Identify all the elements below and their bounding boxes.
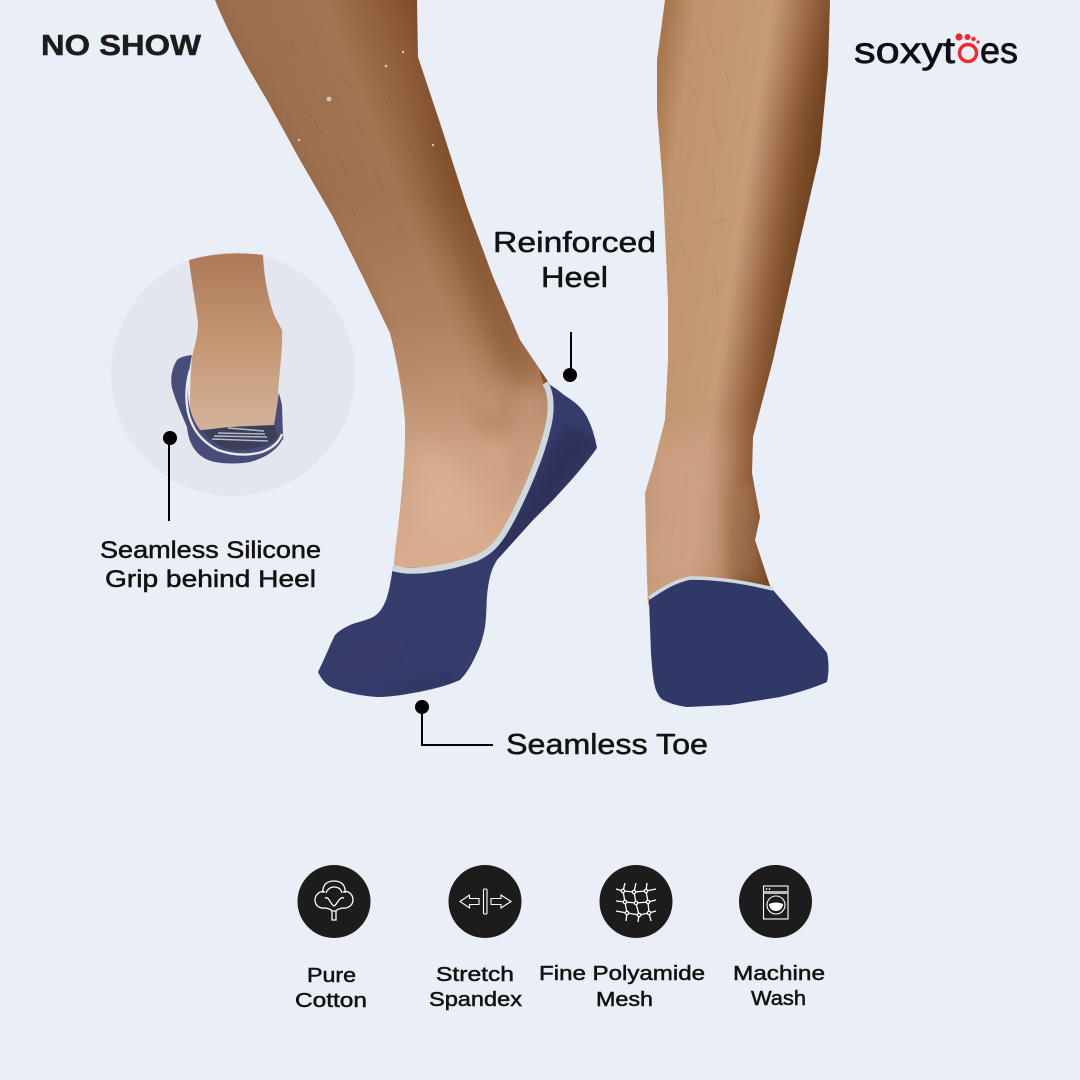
callout: seamless silicone grip: Seamless Silicone (100, 537, 321, 564)
left sock light trim (393, 383, 551, 571)
inset sock white trim (186, 370, 282, 455)
label: machine wash: Wash (751, 988, 806, 1010)
inset silicone grip panel (203, 425, 277, 450)
inset foot skin (189, 253, 284, 440)
label: stretch spandex (429, 964, 522, 1011)
label: fine polyamide mesh (539, 963, 705, 1011)
callout: reinforced heel (493, 227, 656, 382)
callout: seamless toe: Seamless Toe (506, 729, 708, 761)
label: stretch spandex: Spandex (429, 989, 522, 1011)
label: fine polyamide mesh: Mesh (596, 989, 653, 1011)
icon: washing machine (764, 886, 788, 919)
inset grip stripes (212, 428, 268, 441)
callout: seamless silicone grip: Grip behind Heel (105, 566, 316, 593)
label: machine wash (733, 963, 825, 1010)
white skin flecks (298, 51, 434, 146)
callout: seamless silicone grip (100, 431, 321, 593)
right sock light trim (649, 578, 773, 598)
left leg (215, 0, 550, 568)
brand logo: soxytoes: es (980, 30, 1018, 71)
callout: reinforced heel: Heel (541, 262, 608, 294)
icon: stretch arrows (460, 889, 511, 914)
label: pure cotton: Cotton (295, 990, 367, 1012)
brand logo: soxytoes: soxyt (854, 30, 956, 71)
icon: mesh (616, 883, 656, 922)
right foot sock (649, 578, 828, 707)
icon: cotton (315, 881, 353, 920)
inset sock (171, 355, 283, 464)
label: pure cotton (295, 965, 367, 1012)
leg hair texture (260, 30, 433, 237)
callout: seamless toe (415, 700, 708, 761)
inset circle: silicone grip behind heel (111, 252, 355, 496)
right leg (645, 0, 840, 605)
brand logo: soxytoes (854, 30, 1018, 71)
right leg hair texture (680, 35, 745, 297)
label: machine wash: Machine (733, 963, 825, 985)
left foot sock (318, 383, 600, 697)
feature: stretch spandex (448, 865, 522, 938)
callout: reinforced heel: Reinforced (493, 227, 656, 259)
feature: machine wash (739, 865, 812, 938)
logo toe dots (955, 33, 980, 44)
label: pure cotton: Pure (307, 965, 356, 987)
title: no show: NO SHOW (41, 30, 202, 62)
label: stretch spandex: Stretch (436, 964, 514, 986)
feature: pure cotton (298, 865, 370, 938)
logo red toe o (960, 44, 976, 62)
label: fine polyamide mesh: Fine Polyamide (539, 963, 705, 985)
feature: fine polyamide mesh (600, 865, 672, 938)
